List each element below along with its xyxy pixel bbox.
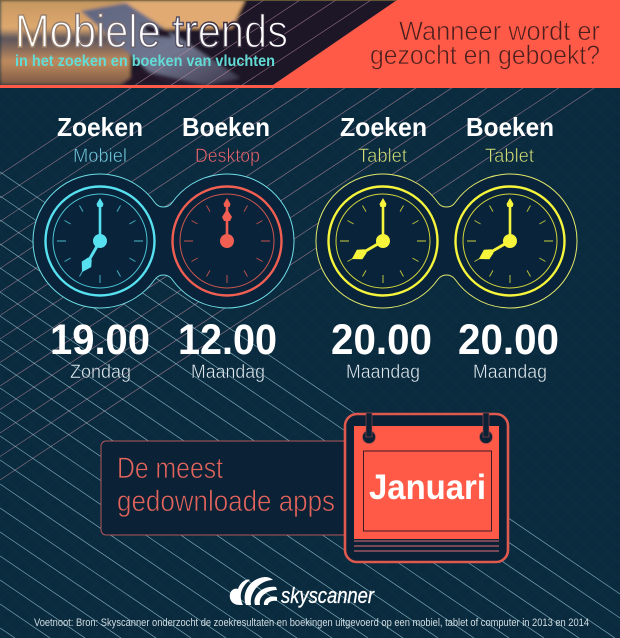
- header photo: tablet at sunset: [0, 0, 397, 85]
- januari: Januari: [369, 468, 486, 507]
- clock: 20.00 zoeken: [328, 186, 438, 296]
- diagonal line pattern: white lines: [0, 172, 620, 638]
- device labels: Tablet: [485, 146, 535, 167]
- icon: cloud: [230, 577, 277, 605]
- header question: Wanneer wordt er: [399, 16, 600, 46]
- callout: de meest gedownloade apps: gedownloade apps: [117, 485, 335, 518]
- column headings: [57, 112, 554, 142]
- header question: [370, 16, 600, 70]
- column headings: Boeken: [466, 112, 554, 142]
- days: Maandag: [473, 361, 547, 383]
- device labels: Mobiel: [73, 146, 127, 167]
- times: 19.00: [50, 316, 150, 364]
- column headings: Boeken: [182, 112, 270, 142]
- days: Zondag: [70, 361, 131, 383]
- calendar date frame: [364, 451, 492, 531]
- title: Mobiele trends: [15, 5, 288, 57]
- clock: 20.00 boeken: [456, 186, 564, 296]
- clock pair: tablet and tablet: [316, 174, 577, 308]
- column headings: Zoeken: [57, 112, 143, 142]
- column headings: Zoeken: [340, 112, 427, 142]
- subtitle: in het zoeken en boeken van vluchten: [15, 53, 275, 70]
- header coral panel: [0, 0, 620, 88]
- calendar page edges: [354, 539, 499, 551]
- device labels: Tablet: [358, 146, 408, 167]
- clock: 19.00: [46, 186, 154, 296]
- clock: 12.00: [172, 186, 282, 296]
- times: [50, 316, 559, 364]
- times: 12.00: [178, 316, 277, 364]
- times: 20.00: [331, 316, 432, 364]
- calendar rings: [362, 413, 492, 444]
- callout: de meest gedownloade apps: [101, 441, 351, 535]
- wordmark: skyscanner: [281, 583, 375, 608]
- callout: de meest gedownloade apps: De meest: [117, 452, 224, 485]
- housing outline: [33, 174, 294, 308]
- skyscanner logo: [230, 577, 375, 608]
- diagonal line pattern: pink lines: [0, 0, 620, 480]
- calendar: [345, 413, 508, 562]
- days: Maandag: [346, 361, 420, 383]
- housing outline: [316, 174, 577, 308]
- header question: gezocht en geboekt?: [370, 40, 600, 70]
- times: 20.00: [458, 316, 559, 364]
- device labels: Desktop: [195, 146, 260, 167]
- calendar page: [354, 426, 499, 539]
- clock pair: mobiel and desktop: [33, 174, 294, 308]
- days: [70, 361, 547, 383]
- days: Maandag: [191, 361, 265, 383]
- device labels: [73, 146, 535, 167]
